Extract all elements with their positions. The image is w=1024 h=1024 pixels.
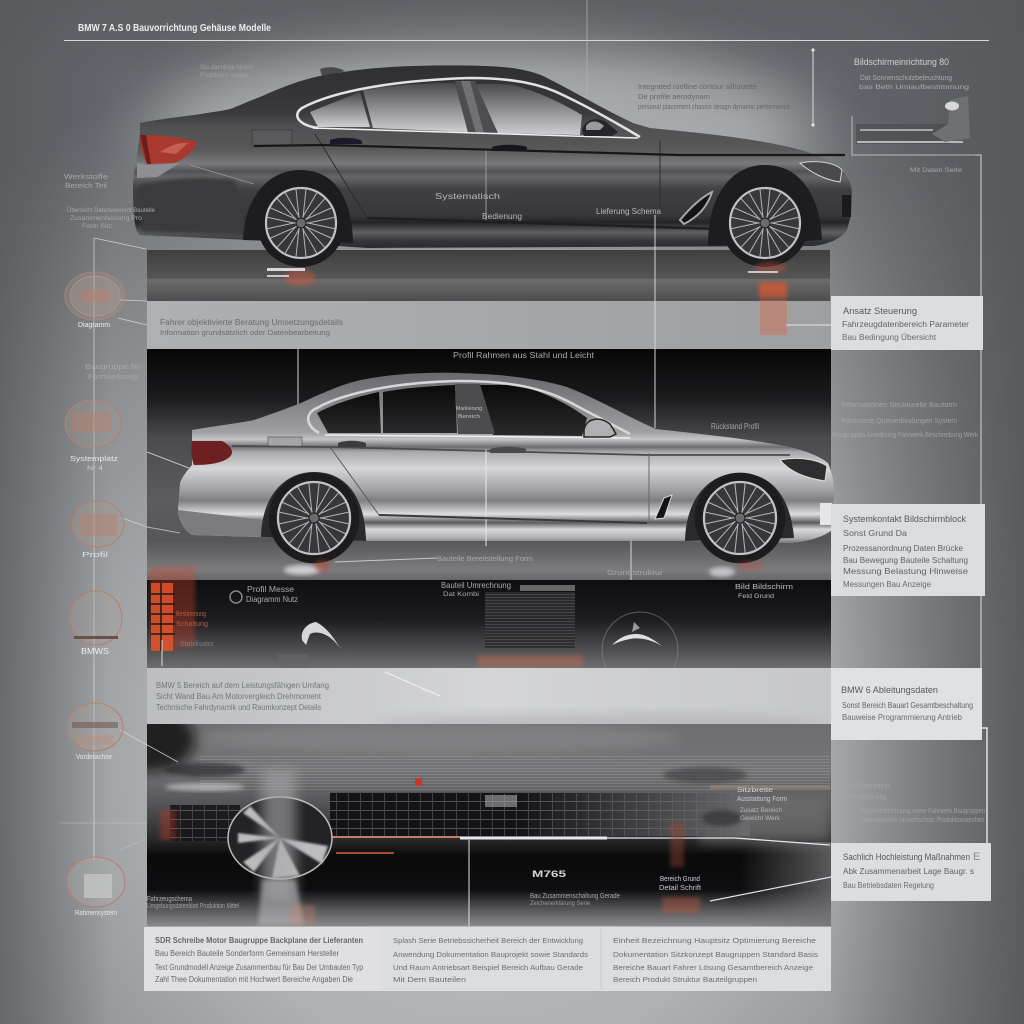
icon: circular detail 3: Profil: [82, 552, 109, 559]
front panel annotations: M765: [532, 869, 566, 879]
front panel annotations: Gewicht Werk: [740, 815, 781, 822]
callout: lower right: [831, 668, 982, 740]
front panel annotations: [147, 785, 830, 913]
front air vent: [680, 192, 712, 224]
red data block: [150, 567, 215, 666]
underbody marker: Grundstruktur: [607, 570, 664, 577]
front panel annotations: Zeichenerklärung Serie: [530, 900, 590, 907]
vertical connectors: [122, 215, 655, 668]
column three: Bereich Produkt Struktur Bauteilgruppen: [613, 975, 757, 984]
left faint labels: Baugruppe Nr: [85, 364, 141, 371]
headlight: [780, 458, 827, 481]
column two: Mit Dem Bauteilen: [393, 975, 466, 984]
strip text and icon: Bauteil Umrechnung: [441, 581, 511, 590]
right faint notes: Einstellbereich: [832, 781, 890, 790]
band caption: Fahrer objektivierte Beratung Umsetzungsdetails: [160, 318, 343, 327]
window chrome frame: [308, 381, 630, 434]
band caption: Information grundsätzlich oder Datenbearbeitung: [160, 330, 330, 337]
label on dark car: Bedienung: [482, 212, 522, 221]
band caption: [160, 318, 343, 337]
column one: Zahl Thee Dokumentation mit Hochwert Bereiche Angaben Die: [155, 975, 353, 984]
column two: Anwendung Dokumentation Bauprojekt sowie Standards: [393, 950, 588, 959]
column two: Und Raum Antriebsart Beispiel Bereich Aufbau Gerade: [393, 963, 583, 972]
annotation: top centre: De profile aerodynam: [638, 92, 710, 101]
engine detail diagram top right: Bildschirmeinrichtung 80: [854, 57, 949, 67]
column three: [613, 936, 818, 984]
engine detail diagram top right: [852, 57, 975, 174]
icon: circular detail 3: [72, 501, 124, 559]
left faint labels: Zusammenfassung Pro: [70, 215, 142, 222]
window glass: [317, 392, 381, 433]
column one: SDR Schreibe Motor Baugruppe Backplane der Lieferanten: [155, 936, 363, 945]
side note right of strip: Bild Bildschirm: [735, 582, 793, 591]
icon: circular detail 2: [65, 400, 121, 472]
front panel annotations: Ausstattung Form: [737, 794, 787, 803]
underbody marker: [284, 556, 764, 577]
wheel arches: [243, 170, 353, 243]
road strip: [147, 250, 830, 301]
engine detail diagram top right: bas Beth Umlaufbestimmung: [859, 84, 969, 91]
faint notes: right upper: [832, 402, 978, 439]
front panel annotations: Sitzbreite: [737, 785, 773, 794]
front panel annotations: Bereich Grund: [660, 874, 700, 883]
red data block: Bestimmung: [176, 611, 206, 618]
faint annotation: top left: Profilform coupe: [200, 72, 248, 79]
light caption band: [147, 668, 831, 724]
panel: bottom text: [144, 927, 831, 991]
mirror: [584, 419, 616, 437]
left faint labels: [64, 174, 155, 381]
annotation: top centre: personal placement chassis design dynamic performance: [638, 102, 790, 111]
connector lines to lower callouts: [469, 596, 987, 926]
icon: circular detail 5: [67, 703, 123, 761]
right faint notes: Verkabelung: [842, 792, 886, 801]
left faint labels: Bereich Teil: [65, 183, 108, 190]
label on dark car: [435, 192, 662, 221]
callout: lower right: Bauweise Programmierung Antrieb: [842, 713, 963, 722]
window chrome frame: [297, 78, 640, 137]
label on dark car: Systematisch: [435, 192, 500, 201]
column two: Splash Serie Betriebssicherheit Bereich der Entwicklung: [393, 936, 583, 945]
side note on silver car panel: Rückstand Profil: [711, 422, 759, 431]
side note right of strip: [735, 582, 793, 600]
band caption text: [156, 681, 329, 712]
panel: technical details dark strip: [147, 580, 831, 668]
front panel annotations: Fahrzeugschema: [147, 896, 192, 903]
callout: mid right: Prozessanordnung Daten Brücke: [843, 544, 964, 553]
callout: top right: [786, 296, 983, 350]
column three: Dokumentation Sitzkonzept Baugruppen Standard Basis: [613, 950, 818, 959]
annotation: top centre: [638, 82, 790, 111]
callout: bottom right: Sachlich Hochleistung Maßnahmen: [843, 852, 970, 863]
red data block: Stabilisator: [180, 641, 215, 648]
right faint notes: Bild Kennzeichnung vorne Fahrwerk Baugruppen: [860, 806, 985, 815]
callout: mid right: Messung Belastung Hinweise: [843, 567, 969, 576]
ghost car on band: [375, 714, 825, 734]
panel: silver car: [147, 349, 831, 580]
window glass: [310, 92, 370, 127]
icon: circular detail 6: Rahmensystem: [75, 910, 117, 917]
callout: top right: Bau Bedingung Übersicht: [842, 333, 937, 342]
callout: mid right: Sonst Grund Da: [843, 529, 908, 538]
pillar label: Markierung: [456, 406, 482, 412]
rear lower shade: [137, 178, 250, 236]
connector: top right down to callouts: [975, 155, 981, 504]
icon: circular detail 1: [65, 272, 125, 329]
bracket line top right: [811, 48, 815, 127]
callout: lower right: Sonst Bereich Bauart Gesamtbeschaltung: [842, 701, 973, 710]
door lines: [252, 130, 292, 146]
callout: mid right: [831, 504, 985, 596]
column three: Einheit Bezeichnung Hauptsitz Optimierung Bereiche: [613, 936, 816, 945]
icon: circular detail 4: BMWS: [81, 647, 109, 656]
right faint notes: Datenspeicher Umweltschutz Produktionseinheit: [860, 815, 985, 824]
label on dark car: Lieferung Schema: [596, 207, 662, 216]
faint notes: right upper: Informationen Strukturelle Bauform: [842, 402, 957, 409]
column one: [155, 936, 363, 984]
column one: Text Grundmodell Anzeige Zusammenbau für Bau Der Umbauten Typ: [155, 963, 363, 972]
tail light: [140, 135, 198, 164]
door handles: [330, 138, 362, 144]
red data block: Schaltung: [176, 621, 208, 628]
front wheel: [228, 770, 332, 925]
grey band: [147, 301, 831, 349]
front panel annotations: Umgebungsdatenblatt Produktion Mittel: [147, 903, 239, 910]
callout: top right: Fahrzeugdatenbereich Parameter: [842, 320, 969, 329]
rear bumper shade: [178, 510, 265, 537]
callout: mid right: Systemkontakt Bildschirmblock: [843, 514, 966, 525]
panels: [268, 437, 302, 447]
pillar label: Bereich: [458, 414, 480, 420]
band caption text: Sicht Wand Bau Am Motorvergleich Drehmoment: [156, 692, 322, 701]
strip text and icon: Dat Kombi: [443, 592, 479, 598]
icon: circular detail 6: [67, 857, 125, 917]
left faint labels: Werkstoffe: [64, 174, 108, 181]
icon: circular detail 2: Nr 4: [87, 466, 104, 472]
callout: mid right: Messungen Bau Anzeige: [843, 580, 932, 589]
headlight: [800, 162, 842, 182]
front panel annotations: Bau Zusammenschaltung Gerade: [530, 891, 620, 900]
band caption text: Technische Fahrdynamik und Raumkonzept Details: [156, 703, 321, 712]
callout: bottom right: [831, 843, 991, 901]
callout: mid right: Bau Bewegung Bauteile Schaltung: [843, 556, 968, 565]
icon: circular detail 5: Vorderachse: [76, 754, 112, 761]
strip text and icon: Profil Messe: [247, 585, 295, 594]
callout: top right: Ansatz Steuerung: [843, 306, 917, 317]
left faint labels: Übersicht Datenelement Bauteile: [67, 206, 155, 214]
suspension details: [278, 612, 678, 688]
engine detail diagram top right: Dat Sonnenschutzbeleuchtung: [860, 75, 952, 82]
strip text and icon: Diagramm Nutz: [246, 595, 298, 604]
title: BMW 7 A.S 0 Bauvorrichtung Gehäuse Modelle: [78, 23, 271, 34]
callout: bottom right: E: [973, 851, 980, 863]
callout: lower right: BMW 6 Ableitungsdaten: [841, 685, 938, 696]
icon: circular detail 4: [70, 591, 122, 656]
front air vent: [655, 495, 672, 519]
silver side-view car: [178, 373, 834, 563]
front panel annotations: Zusatz Bereich: [740, 807, 782, 814]
column three: Bereiche Bauart Fahrer Lösung Gesamtbereich Anzeige: [613, 963, 813, 972]
column one: Bau Bereich Bauteile Sonderform Gemeinsam Hersteller: [155, 949, 339, 958]
front panel annotations: Detail Schrift: [659, 883, 702, 892]
callout: bottom right: Bau Betriebsdaten Regelung: [843, 881, 934, 890]
left faint labels: Formwerkzeug: [88, 374, 138, 381]
faint annotation: top left: [200, 64, 253, 79]
icon: circular detail 1: Diagramm: [78, 322, 110, 329]
mirror: [582, 119, 618, 136]
digital grid block: [478, 585, 583, 678]
column two: [393, 936, 588, 984]
underbody marker: Bauteile Bereitstellung Form: [437, 556, 533, 563]
left timeline axis: [60, 238, 178, 860]
faint notes: right upper: Baugruppen Anordnung Fahrwerk Beschreibung Werk: [832, 432, 978, 439]
band caption text: BMW 5 Bereich auf dem Leistungsfähigen Umfang: [156, 681, 329, 690]
tail light: [191, 441, 232, 465]
icon: circular detail 2: Systemplatz: [70, 456, 119, 463]
callout: bottom right: Abk Zusammenarbeit Lage Baugr. s: [843, 867, 974, 876]
panel header text: Profil Rahmen aus Stahl und Leicht: [453, 351, 595, 360]
pillar label: [456, 406, 482, 420]
dark side-view car: [133, 65, 852, 267]
strip text and icon: [230, 581, 511, 604]
door handles: [338, 441, 366, 447]
red glow markers under car: [267, 262, 787, 335]
faint notes: right upper: Karosserie Querverbindungen System: [842, 418, 957, 425]
left faint labels: Form Sitz: [82, 223, 112, 230]
annotation: top centre: Integrated roofline contour silhouette: [638, 82, 757, 91]
right faint notes: [832, 781, 985, 824]
side note right of strip: Feld Grund: [738, 593, 774, 600]
panel: front view blurred car: [147, 724, 831, 926]
faint annotation: top left: Sta dachlinie hinten: [200, 64, 253, 71]
engine detail diagram top right: Mit Daten Seite: [910, 167, 962, 174]
